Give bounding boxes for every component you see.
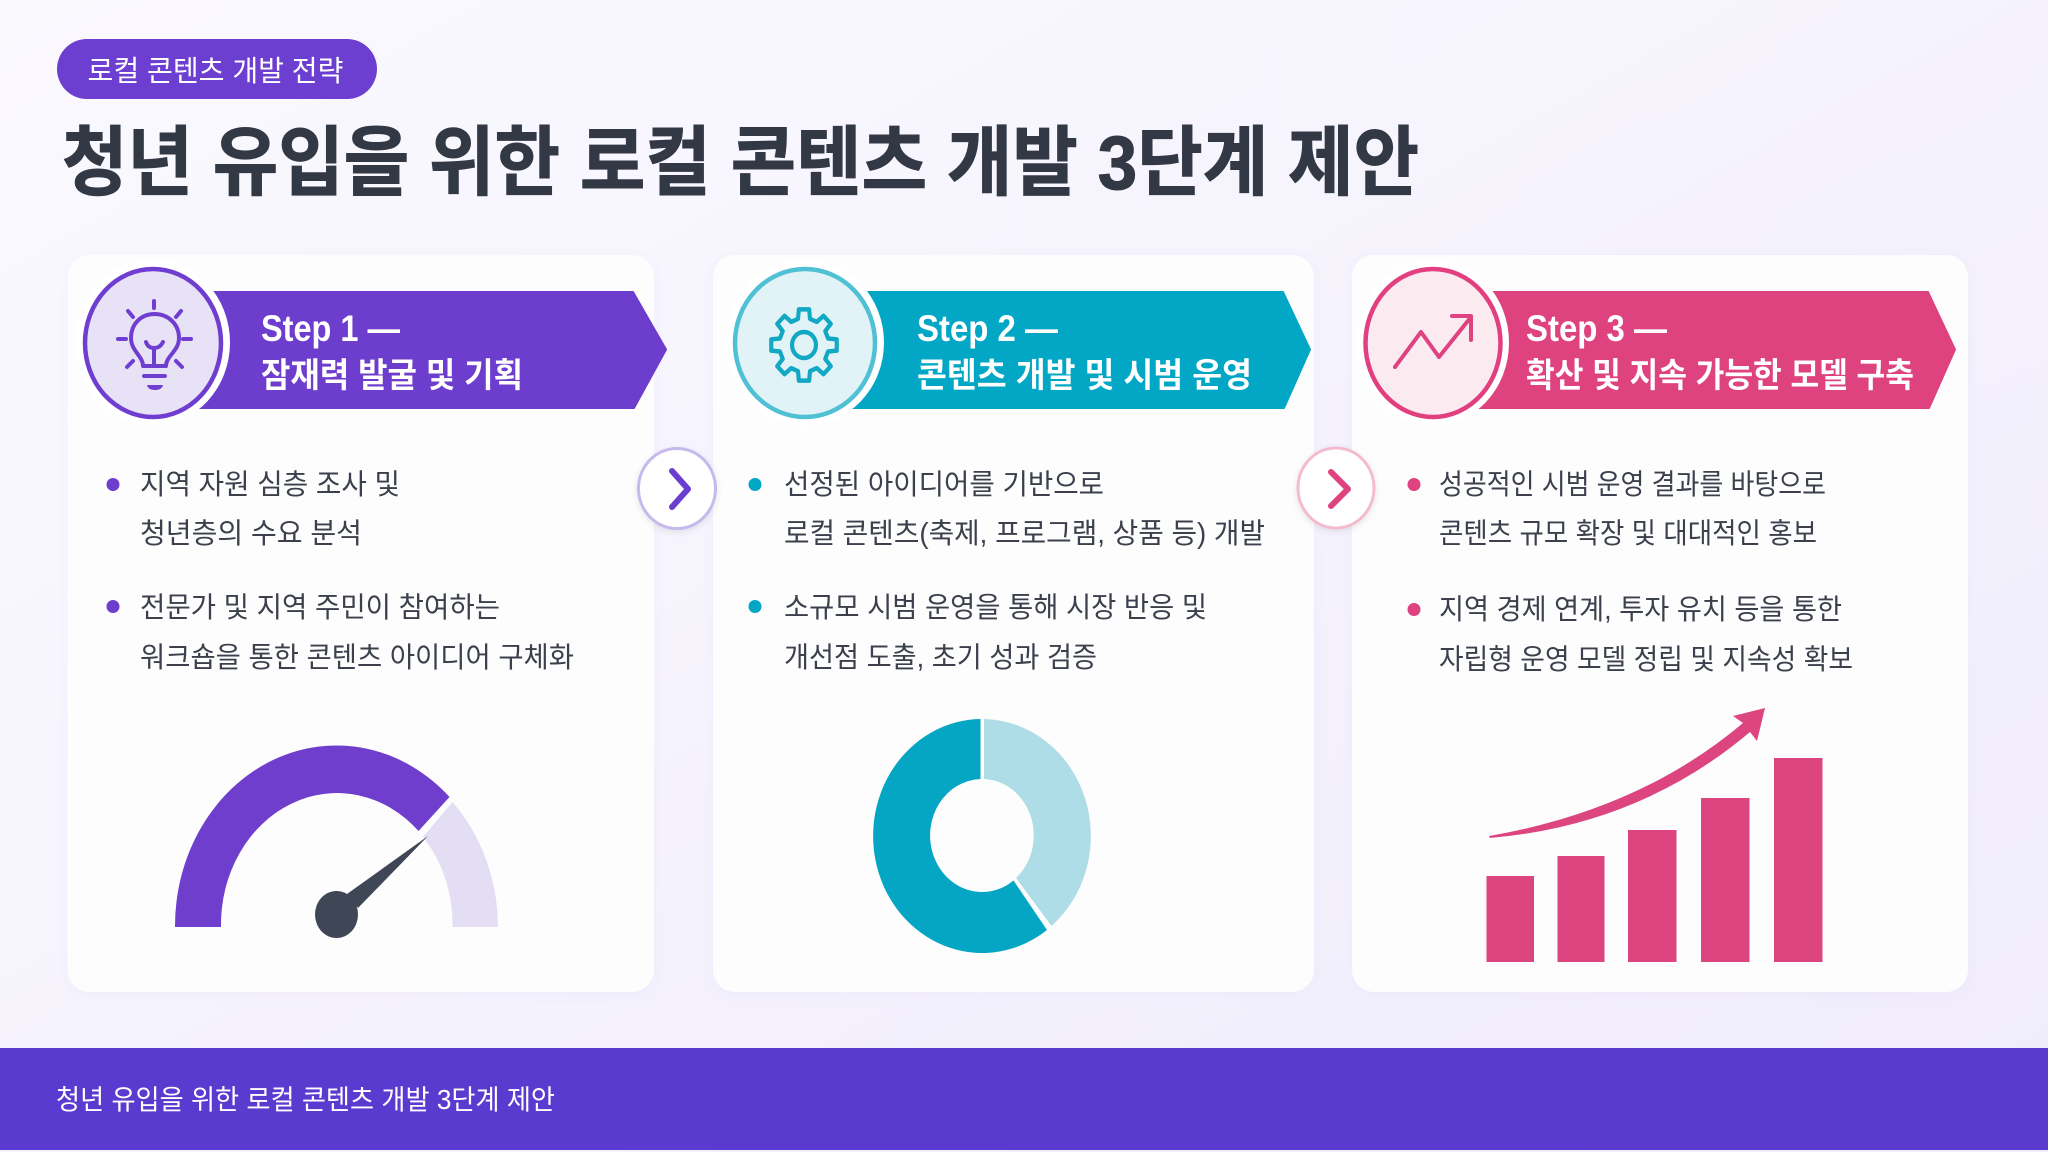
category tag [57, 39, 377, 99]
bar chart with growth arrow [1486, 708, 1822, 962]
bullet list: step 1: 지역 자원 심층 조사 및 [140, 469, 400, 501]
panel: step 1 [68, 255, 666, 992]
donut chart [873, 719, 1091, 953]
bullet list: step 3: 콘텐츠 규모 확장 및 대대적인 홍보 [1439, 518, 1817, 550]
card background [68, 255, 654, 992]
bullet list: step 1: 청년층의 수요 분석 [140, 518, 362, 550]
card background [713, 255, 1314, 992]
banner: step 3: Step 3 — [1526, 308, 1667, 349]
arrow: step 2 to step 3 [1298, 448, 1374, 528]
banner: step 3 [1470, 292, 1955, 408]
icon: trend line [1357, 260, 1509, 426]
banner: step 2: Step 2 — [917, 308, 1058, 349]
banner: step 3: 확산 및 지속 가능한 모델 구축 [1526, 357, 1914, 395]
panel: step 2 [713, 255, 1314, 992]
bullet list: step 1: 워크숍을 통한 콘텐츠 아이디어 구체화 [140, 642, 574, 674]
arrow: step 1 to step 2 [638, 448, 716, 528]
icon: gear [726, 260, 884, 426]
gauge chart [175, 745, 498, 938]
bullet list: step 2: 소규모 시범 운영을 통해 시장 반응 및 [784, 592, 1207, 624]
banner: step 1: 잠재력 발굴 및 기획 [261, 357, 523, 395]
bullet list: step 2: 선정된 아이디어를 기반으로 [784, 469, 1104, 501]
card background [1352, 255, 1968, 992]
bullet list: step 1: 전문가 및 지역 주민이 참여하는 [140, 592, 500, 624]
banner: step 1: Step 1 — [261, 308, 400, 349]
bullet list: step 3: 자립형 운영 모델 정립 및 지속성 확보 [1439, 644, 1853, 676]
banner: step 2 [835, 292, 1310, 408]
category tag: 로컬 콘텐츠 개발 전략 [88, 55, 344, 88]
bullet list: step 3 [1408, 469, 1853, 676]
footer bar: 청년 유입을 위한 로컬 콘텐츠 개발 3단계 제안 [56, 1084, 555, 1115]
bullet list: step 2: 로컬 콘텐츠(축제, 프로그램, 상품 등) 개발 [784, 518, 1265, 550]
banner: step 2: 콘텐츠 개발 및 시범 운영 [917, 357, 1252, 395]
panel: step 3 [1352, 255, 1968, 992]
bullet list: step 3: 성공적인 시범 운영 결과를 바탕으로 [1439, 469, 1826, 501]
footer bar [0, 1048, 2048, 1150]
bullet list: step 2: 개선점 도출, 초기 성과 검증 [784, 642, 1097, 674]
bullet list: step 2 [748, 469, 1265, 674]
banner: step 1 [190, 292, 666, 408]
title: 청년 유입을 위한 로컬 콘텐츠 개발 3단계 제안 [62, 121, 1419, 206]
bullet list: step 1 [106, 469, 574, 674]
bullet list: step 3: 지역 경제 연계, 투자 유치 등을 통한 [1439, 594, 1842, 626]
icon: light bulb [76, 260, 230, 426]
